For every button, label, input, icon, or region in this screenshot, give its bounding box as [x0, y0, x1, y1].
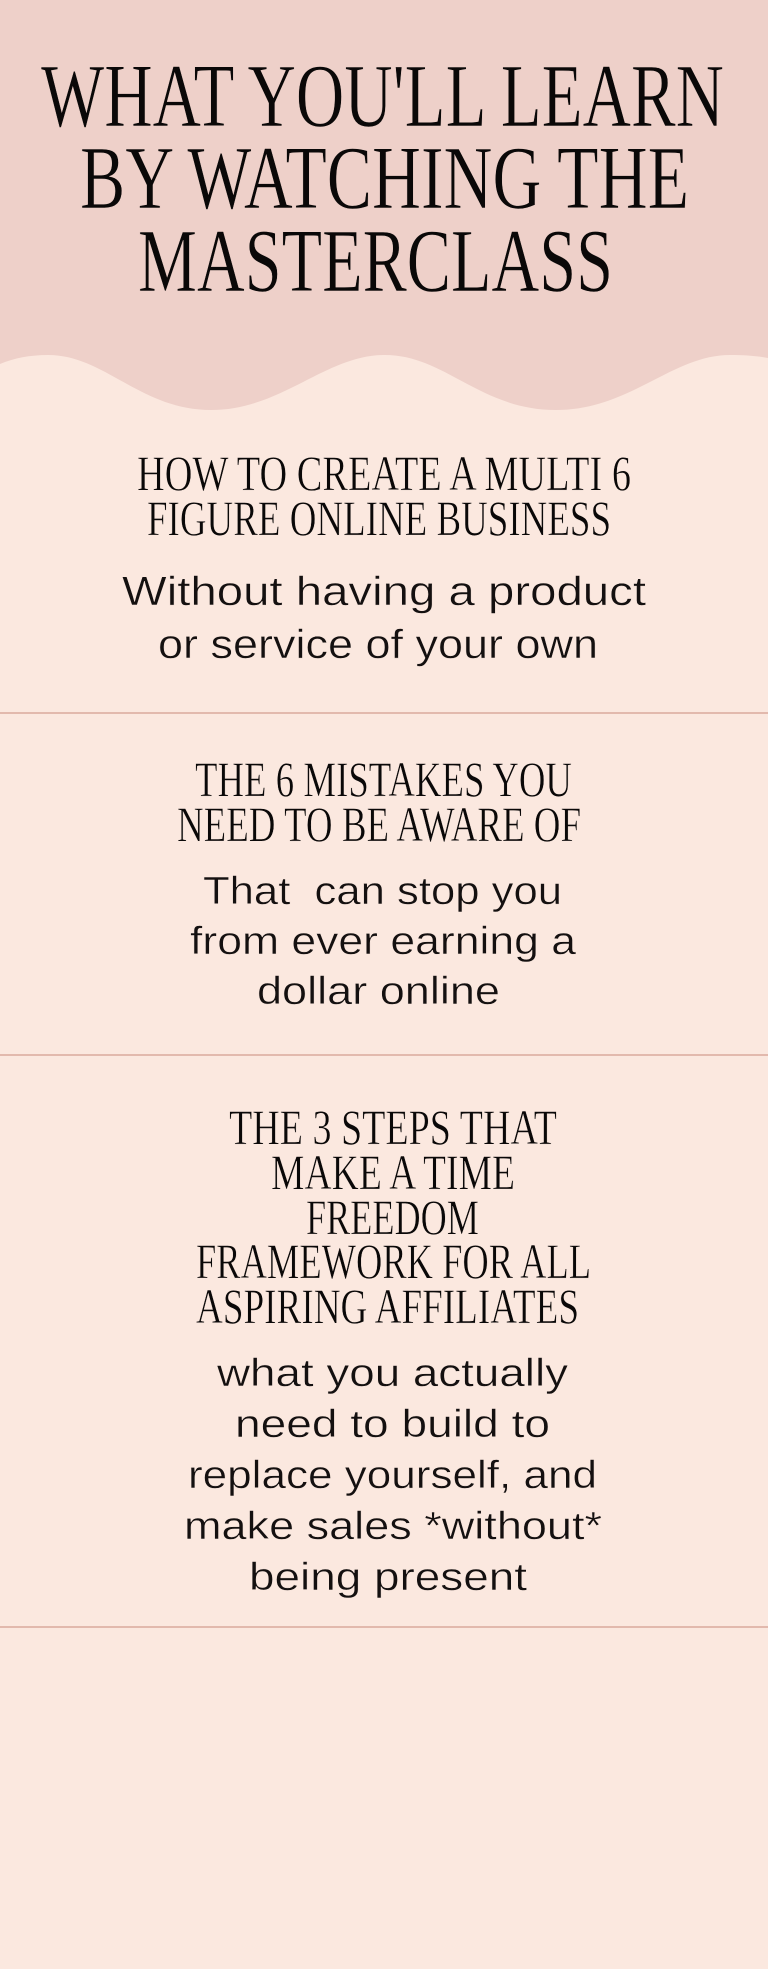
section 2 heading: THE 6 MISTAKES YOU [195, 751, 572, 807]
title [41, 47, 724, 311]
title: MASTERCLASS [138, 212, 613, 311]
section 3 heading [196, 1099, 591, 1334]
section 3 heading: FREEDOM [306, 1189, 479, 1245]
section 3 text: being present [249, 1556, 527, 1599]
section 2: the 6 mistakes [177, 751, 581, 1013]
section 3 text: what you actually [216, 1352, 569, 1395]
section 3: the 3 steps [184, 1099, 602, 1599]
section 2 heading: NEED TO BE AWARE OF [177, 796, 581, 852]
section 2 heading [177, 751, 581, 852]
section 2 text: dollar online [257, 970, 500, 1013]
section 1 text [122, 568, 647, 667]
section 2 text: That can stop you [203, 870, 562, 913]
section 2 text [190, 870, 576, 1013]
section 3 text [184, 1352, 602, 1599]
section 3 text: make sales *without* [184, 1505, 602, 1548]
header wave band [0, 0, 768, 410]
section 1: multi 6 figure business [122, 445, 647, 667]
section 3 heading: ASPIRING AFFILIATES [196, 1278, 579, 1334]
section 1 heading: HOW TO CREATE A MULTI 6 [137, 445, 631, 501]
section 2 text: from ever earning a [190, 920, 576, 963]
section 1 heading [137, 445, 631, 546]
section 3 text: replace yourself, and [188, 1454, 597, 1497]
section 1 text: or service of your own [158, 621, 598, 667]
section 3 text: need to build to [235, 1403, 550, 1446]
section 1 text: Without having a product [122, 568, 647, 614]
section 3 heading: MAKE A TIME [271, 1144, 515, 1200]
section 1 heading: FIGURE ONLINE BUSINESS [147, 490, 611, 546]
section 3 heading: FRAMEWORK FOR ALL [196, 1233, 591, 1289]
section 3 heading: THE 3 STEPS THAT [229, 1099, 557, 1155]
